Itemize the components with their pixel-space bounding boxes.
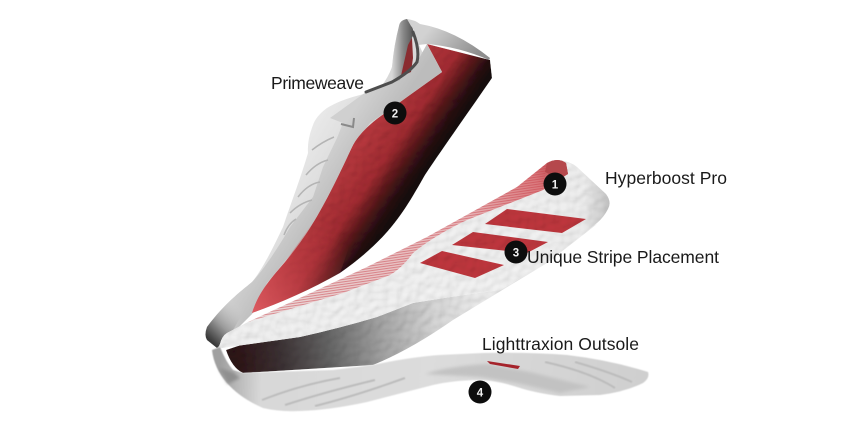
label: Primeweave: Primeweave bbox=[271, 73, 364, 93]
outsole: arch shadow bbox=[425, 364, 590, 393]
upper: grey side panel bbox=[207, 44, 442, 348]
stripe 1 bbox=[485, 209, 586, 233]
upper: white body bbox=[206, 19, 440, 348]
stripe 3 bbox=[420, 251, 504, 278]
upper: inner heel red bbox=[398, 38, 413, 78]
label: Hyperboost Pro: Hyperboost Pro bbox=[605, 168, 727, 188]
midsole: foam and stripes bbox=[219, 160, 610, 348]
badge 1 bbox=[544, 172, 566, 196]
badge 4: 4 bbox=[477, 388, 484, 400]
upper shoe (Primeweave) bbox=[206, 19, 492, 348]
upper: eyelet bbox=[341, 118, 354, 127]
midsole (Hyperboost Pro) bbox=[219, 160, 610, 373]
upper: red primeweave panel bbox=[252, 44, 492, 313]
badge 4 bbox=[468, 380, 492, 404]
midsole: white foam top bbox=[219, 160, 610, 348]
midsole: heel red patch bbox=[545, 160, 568, 178]
upper: heel tab bbox=[380, 19, 414, 88]
upper: toe shade bbox=[206, 282, 252, 348]
badge 2: 2 bbox=[392, 108, 398, 120]
outsole (Lighttraxion) bbox=[212, 347, 648, 411]
badge 2 bbox=[384, 102, 406, 124]
outsole: red logo bbox=[487, 361, 520, 369]
badge 3: 3 bbox=[513, 248, 519, 260]
upper: collar dark rim bbox=[366, 32, 418, 92]
upper: laces bbox=[284, 137, 334, 235]
label: Lighttraxion Outsole: Lighttraxion Outsole bbox=[482, 334, 639, 354]
label: Unique Stripe Placement: Unique Stripe Placement bbox=[527, 247, 719, 267]
outsole: body bbox=[212, 347, 648, 411]
badge 1: 1 bbox=[552, 180, 559, 192]
badge 3 bbox=[504, 240, 528, 264]
outsole: tread lines bbox=[262, 362, 632, 406]
midsole: red mesh strip bbox=[248, 160, 568, 322]
outsole: heel shade bbox=[219, 368, 240, 384]
upper: heel collar bbox=[407, 19, 490, 60]
upper: bright toe of red panel bbox=[252, 203, 355, 313]
stripe 2 bbox=[452, 232, 548, 253]
midsole: dark side wall bbox=[226, 224, 597, 373]
midsole: mesh hatch bbox=[248, 163, 547, 322]
